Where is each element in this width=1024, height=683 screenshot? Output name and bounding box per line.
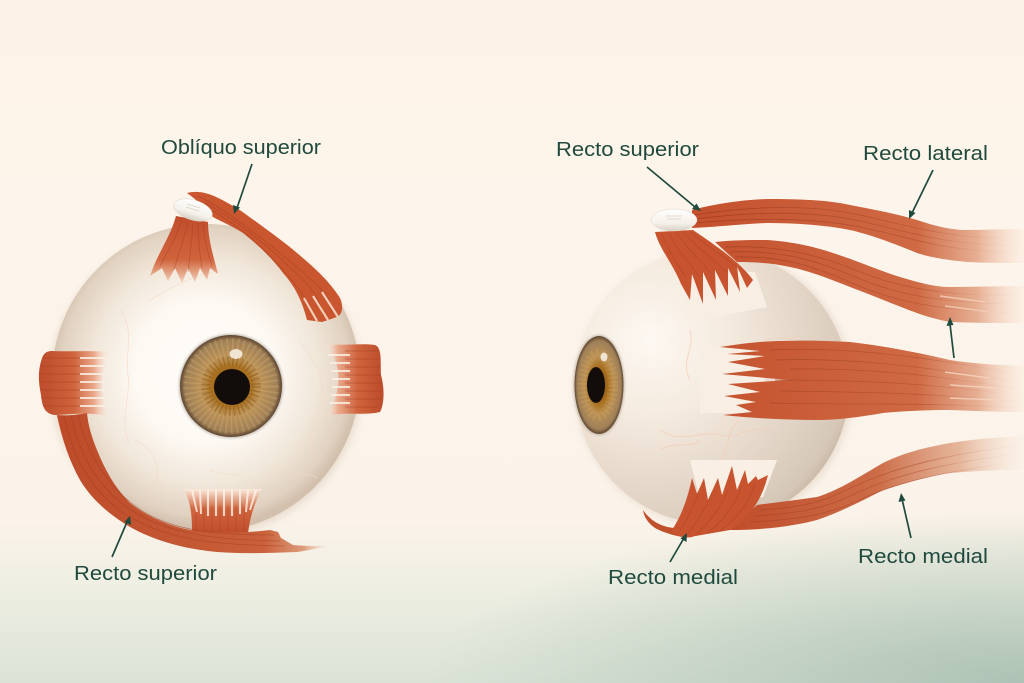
arrow: Recto medial right <box>898 493 911 538</box>
muscle: left attachment <box>39 351 108 416</box>
label: Recto superior right: Recto superior <box>556 139 699 161</box>
iris side <box>574 335 624 435</box>
label: Oblíquo superior: Oblíquo superior <box>161 137 321 159</box>
eyeball side <box>575 250 852 526</box>
label: Recto medial bottom: Recto medial <box>608 567 738 589</box>
label: Recto lateral: Recto lateral <box>863 143 988 165</box>
arrow: Recto medial bottom <box>670 533 687 562</box>
arrow: Oblíquo superior <box>233 164 252 214</box>
muscle: lower curved band <box>57 413 330 553</box>
panel: right eye side view <box>574 199 1024 537</box>
muscle: second lateral band <box>715 240 1024 323</box>
muscle: bottom fan <box>184 489 262 533</box>
label: Recto medial right: Recto medial <box>858 546 988 568</box>
muscle: top fan with trochlea <box>150 216 218 283</box>
arrow: Recto lateral <box>909 170 933 219</box>
muscle: top fan side with fringe <box>655 230 767 322</box>
arrow: second lateral band <box>946 317 954 358</box>
trochlea side <box>651 209 697 231</box>
trochlea front <box>171 195 215 225</box>
panel: left eye front view <box>39 192 384 553</box>
eyeball front <box>50 224 362 536</box>
label: Recto superior left: Recto superior <box>74 563 217 585</box>
arrow: Recto superior left <box>112 516 131 557</box>
muscle: central band with fringe <box>700 341 1024 420</box>
muscle: right attachment <box>325 344 384 416</box>
muscle: recto lateral <box>692 199 1024 263</box>
arrow: Recto superior right <box>647 167 701 211</box>
muscle: lower medial band <box>730 436 1024 530</box>
iris front <box>179 334 283 438</box>
muscle: bottom hook with fan <box>643 460 777 537</box>
muscle: superior oblique tendon <box>187 192 342 322</box>
